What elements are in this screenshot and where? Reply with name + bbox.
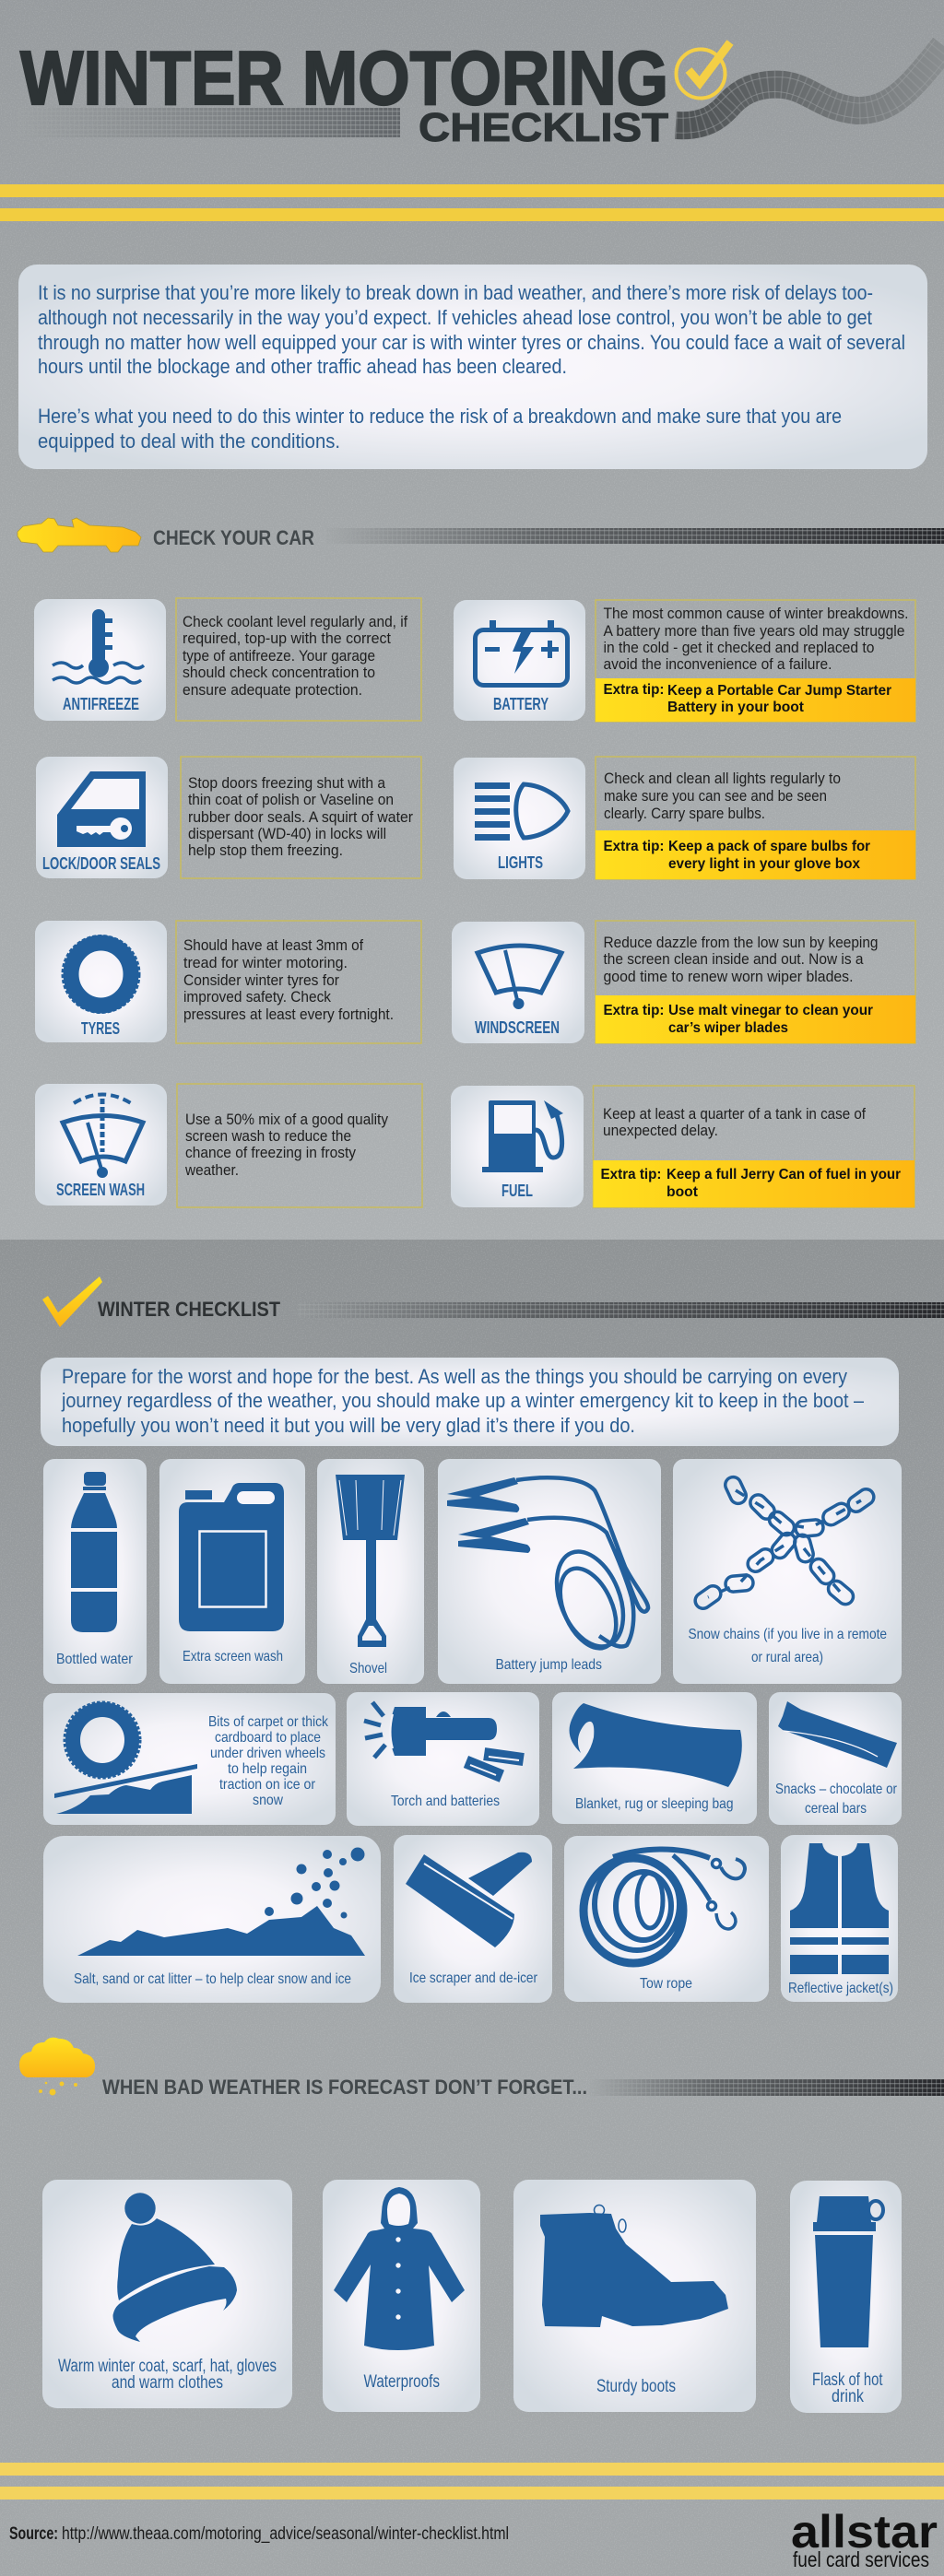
description box: thin coat of polish or Vaseline on (188, 791, 394, 808)
icon: blanket roll (570, 1703, 742, 1787)
intro text (38, 281, 905, 453)
caption: snow (253, 1793, 283, 1808)
item: flask (790, 2181, 902, 2413)
caption (775, 1782, 898, 1817)
icon: boot (540, 2205, 728, 2327)
item: shovel (317, 1459, 424, 1684)
description box: ensure adequate protection. (183, 681, 362, 699)
caption: traction on ice or (219, 1777, 316, 1793)
caption: or rural area) (751, 1650, 823, 1665)
description box (596, 600, 915, 722)
item: snow chains (673, 1459, 902, 1684)
heading text: CHECK YOUR CAR (153, 526, 314, 549)
caption: Extra screen wash (183, 1649, 283, 1664)
description box: Consider winter tyres for (183, 971, 339, 989)
item: salt and sand (43, 1836, 381, 2003)
description box (596, 921, 915, 1043)
item: snacks (769, 1692, 902, 1825)
icon: tow rope coil (584, 1849, 745, 1963)
caption: drink (832, 2387, 864, 2406)
intro text: although not necessarily in the way you’d expect. If vehicles ahead lose control, you won’t be able to get (38, 306, 872, 329)
icon: yellow car (18, 518, 141, 552)
extra tip (596, 830, 915, 879)
description box: the screen clean inside and out. Now is a (603, 950, 864, 968)
icon: check mark in circle (677, 42, 730, 98)
subtitle: checklist: CHECKLIST (419, 105, 668, 150)
description box (596, 757, 915, 879)
caption: Salt, sand or cat litter – to help clear snow and ice (74, 1971, 351, 1987)
extra tip (594, 1160, 914, 1207)
intro text: Here’s what you need to do this winter to reduce the risk of a breakdown and make sure that you are (38, 405, 842, 428)
caption (812, 2370, 883, 2406)
description box: Stop doors freezing shut with a (188, 774, 385, 792)
description box: in the cold - get it checked and replaced to (603, 639, 874, 656)
label: ANTIFREEZE (63, 695, 139, 713)
extra tip: Extra tip: (603, 839, 664, 854)
tyre track bar (298, 1302, 944, 1318)
extra tip: car’s wiper blades (668, 1020, 788, 1036)
item: warm clothes (42, 2180, 292, 2408)
extra tip: Extra tip: (603, 682, 664, 698)
panel: tyres (35, 921, 421, 1043)
icon: thermometer in water (53, 609, 144, 683)
icon: washer and wiper (63, 1095, 143, 1178)
caption: Snacks – chocolate or (775, 1782, 898, 1797)
intro text: hours until the blockage and other traffic ahead has been cleared. (38, 355, 567, 378)
caption: Flask of hot (812, 2370, 883, 2390)
item: sturdy boots (513, 2180, 756, 2412)
panel: screen wash (35, 1084, 422, 1207)
heading text: WHEN BAD WEATHER IS FORECAST DON’T FORGET... (102, 2076, 587, 2099)
item: ice scraper (394, 1835, 552, 2003)
icon: jacket (790, 1843, 889, 1974)
description box: improved safety. Check (183, 988, 331, 1006)
panel: antifreeze (34, 598, 421, 721)
title: winter motoring: WINTER MOTORING (20, 35, 668, 121)
caption (688, 1627, 887, 1665)
icon: yellow cloud with drops (19, 2038, 95, 2096)
tyre track left of subtitle (18, 108, 400, 137)
description box: Check and clean all lights regularly to (604, 770, 841, 787)
source line: Source: (9, 2524, 58, 2544)
icon: battery (476, 620, 568, 686)
description box (594, 1086, 914, 1207)
icon: headlight (475, 782, 568, 841)
panel: winter checklist intro (41, 1358, 899, 1446)
panel: lights (454, 757, 915, 879)
intro text: Prepare for the worst and hope for the best. As well as the things you should be carrying on every (62, 1365, 847, 1388)
intro text: hopefully you won’t need it but you will be very glad it’s there if you do. (62, 1414, 635, 1437)
intro text: journey regardless of the weather, you should make up a winter emergency kit to keep in the boot – (61, 1389, 865, 1412)
icon: flask (813, 2196, 883, 2347)
icon: bobble hat (112, 2193, 237, 2342)
extra tip: Keep a full Jerry Can of fuel in your (667, 1167, 901, 1182)
extra tip: Keep a Portable Car Jump Starter (667, 683, 891, 699)
panel: windscreen (452, 921, 915, 1043)
label: BATTERY (493, 695, 549, 713)
caption: Blanket, rug or sleeping bag (575, 1796, 734, 1812)
caption (58, 2357, 277, 2393)
description box: avoid the inconvenience of a failure. (603, 655, 832, 673)
description box: should check concentration to (183, 664, 375, 681)
description box: good time to renew worn wiper blades. (603, 968, 854, 985)
item: torch and batteries (347, 1692, 539, 1826)
description box: clearly. Carry spare bulbs. (604, 805, 765, 822)
caption: Battery jump leads (496, 1657, 602, 1673)
icon: scraper (406, 1853, 532, 1947)
description box: weather. (184, 1161, 239, 1179)
description box: Check coolant level regularly and, if (183, 613, 407, 630)
icon: jump leads (447, 1477, 648, 1657)
description box: screen wash to reduce the (185, 1127, 351, 1145)
icon: raincoat (334, 2187, 465, 2350)
description box: tread for winter motoring. (183, 954, 348, 971)
caption: cardboard to place (215, 1730, 321, 1746)
description box: make sure you can see and be seen (604, 787, 827, 805)
caption: Torch and batteries (391, 1794, 500, 1809)
icon: chains (692, 1475, 877, 1612)
caption: cereal bars (805, 1801, 867, 1817)
caption: Shovel (349, 1661, 387, 1676)
extra tip (596, 678, 915, 722)
extra tip: boot (667, 1184, 699, 1200)
caption: Warm winter coat, scarf, hat, gloves (58, 2357, 277, 2376)
caption: Tow rope (640, 1976, 692, 1992)
icon: pile of salt (77, 1847, 365, 1956)
label: LOCK/DOOR SEALS (42, 854, 160, 873)
extra tip: Extra tip: (601, 1167, 662, 1182)
description box: Should have at least 3mm of (183, 936, 363, 954)
road lines bottom (0, 2463, 944, 2500)
extra tip: Keep a pack of spare bulbs for (668, 839, 870, 854)
caption (208, 1714, 329, 1808)
label: WINDSCREEN (475, 1018, 560, 1037)
extra tip (596, 995, 915, 1043)
description box: type of antifreeze. Your garage (183, 647, 375, 665)
description box: help stop them freezing. (188, 841, 343, 859)
icon: car door with key (57, 771, 146, 847)
extra tip: Battery in your boot (667, 700, 805, 715)
description box: Reduce dazzle from the low sun by keeping (603, 934, 878, 951)
description box: The most common cause of winter breakdowns. (603, 605, 909, 622)
item: waterproofs (323, 2180, 480, 2412)
intro text (61, 1365, 865, 1437)
icon: windscreen wiper (478, 946, 561, 1009)
caption: to help regain (228, 1761, 307, 1777)
caption: and warm clothes (112, 2373, 223, 2393)
label: FUEL (502, 1182, 533, 1200)
caption: Reflective jacket(s) (788, 1981, 893, 1996)
icon: tyre (63, 936, 139, 1012)
item: blanket (552, 1692, 757, 1824)
road lines top (0, 184, 944, 221)
tyre track curving right (676, 41, 944, 133)
description box: required, top-up with the correct (183, 629, 391, 647)
description box (177, 1084, 422, 1207)
item: battery jump leads (438, 1459, 661, 1684)
icon: tyre on ramp (54, 1702, 197, 1814)
section heading: check your car (18, 518, 944, 552)
caption: Bottled water (56, 1652, 134, 1667)
caption: Snow chains (if you live in a remote (688, 1627, 887, 1642)
description box (176, 921, 421, 1043)
panel: lock and door seals (36, 757, 421, 878)
intro text: equipped to deal with the conditions. (38, 429, 340, 453)
label: TYRES (81, 1019, 120, 1038)
item: extra screen wash (159, 1459, 305, 1684)
description box: Use a 50% mix of a good quality (185, 1111, 388, 1128)
icon: fuel pump (482, 1100, 563, 1172)
description box (176, 598, 421, 721)
description box: chance of freezing in frosty (185, 1144, 356, 1161)
panel: battery (454, 600, 915, 722)
heading text: WINTER CHECKLIST (98, 1298, 281, 1321)
description box: A battery more than five years old may struggle (603, 622, 905, 640)
logo: allstar: allstar (791, 2506, 938, 2558)
panel: introduction (18, 265, 927, 469)
icon: yellow tick (42, 1276, 102, 1327)
panel: fuel (451, 1086, 914, 1207)
icon: snack bar (778, 1701, 897, 1768)
source line: http://www.theaa.com/motoring_advice/seasonal/winter-checklist.html (62, 2524, 509, 2544)
icon: can (179, 1483, 284, 1631)
extra tip: every light in your glove box (668, 856, 860, 872)
header: title block (18, 35, 944, 150)
item: bottled water (43, 1459, 147, 1684)
description box: Keep at least a quarter of a tank in case of (603, 1105, 866, 1123)
label: LIGHTS (498, 853, 543, 872)
section heading: bad weather (19, 2038, 944, 2099)
description box: pressures at least every fortnight. (183, 1006, 394, 1023)
icon: torch (364, 1702, 525, 1782)
section heading: winter checklist (42, 1276, 944, 1327)
caption: Waterproofs (363, 2372, 440, 2392)
description box: dispersant (WD-40) in locks will (188, 825, 386, 842)
item: carpet or cardboard (43, 1693, 336, 1825)
extra tip: Use malt vinegar to clean your (668, 1003, 873, 1018)
description box (181, 757, 421, 878)
item: tow rope (564, 1836, 769, 2002)
description box: rubber door seals. A squirt of water (188, 808, 413, 826)
caption: under driven wheels (210, 1746, 325, 1761)
caption: Ice scraper and de-icer (409, 1970, 538, 1986)
item: reflective jacket (781, 1835, 898, 2002)
tyre track bar (590, 2079, 944, 2096)
caption: Bits of carpet or thick (208, 1714, 329, 1730)
description box: unexpected delay. (603, 1122, 718, 1139)
caption: Sturdy boots (596, 2377, 676, 2396)
tyre track bar (325, 528, 944, 544)
icon: bottle (71, 1472, 117, 1632)
icon: shovel (336, 1475, 405, 1647)
extra tip: Extra tip: (603, 1003, 664, 1018)
label: SCREEN WASH (56, 1181, 145, 1199)
